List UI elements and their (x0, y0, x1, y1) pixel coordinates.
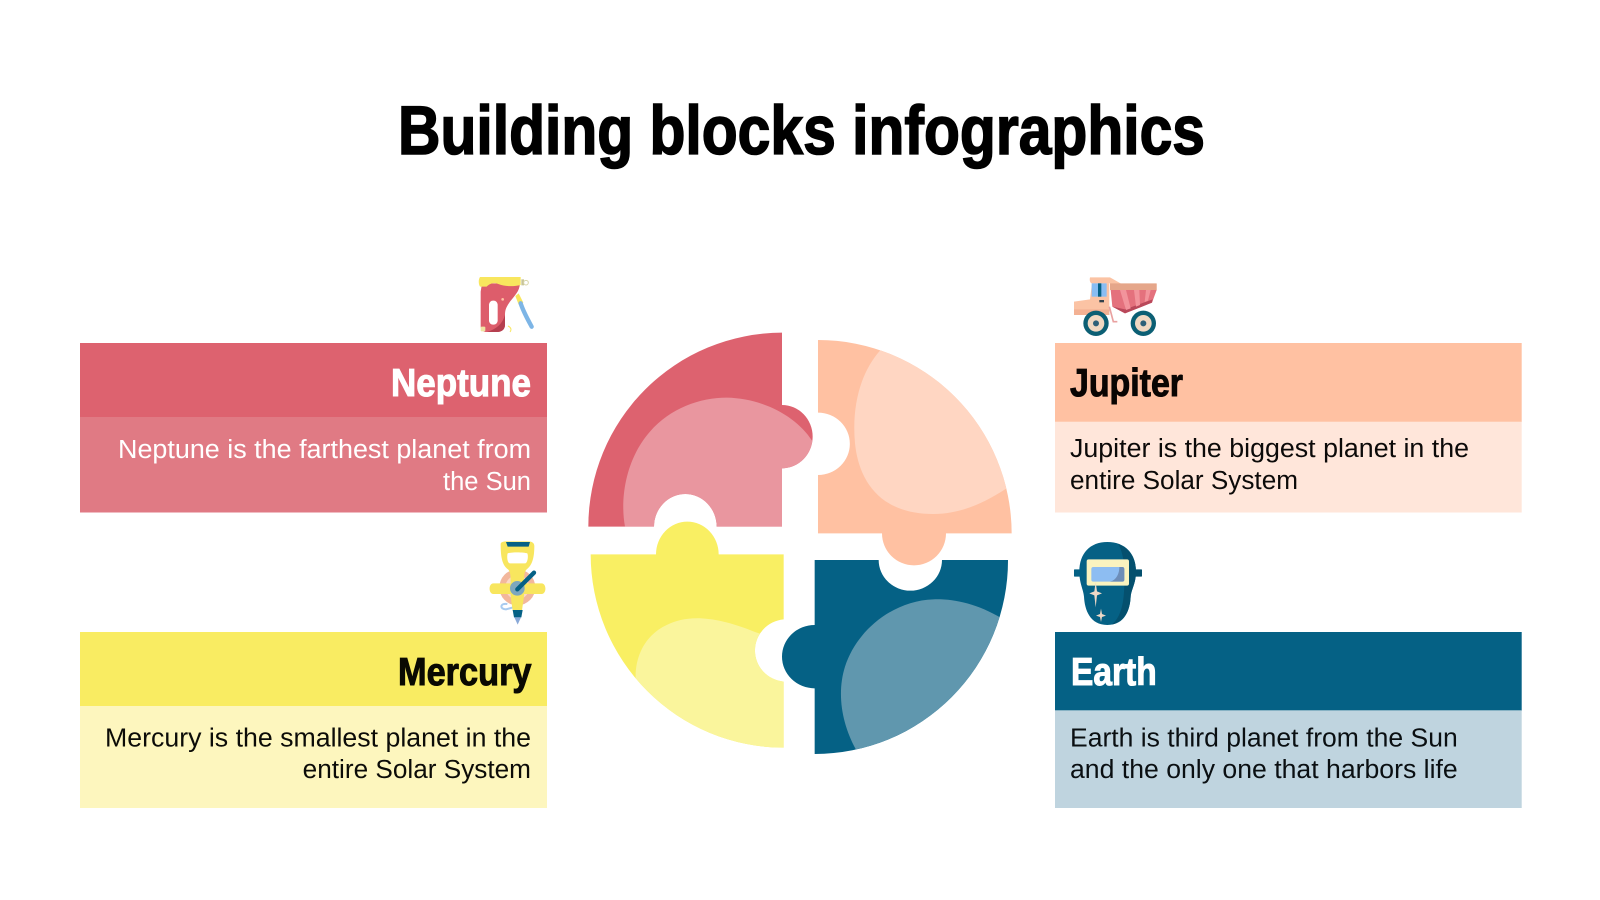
Jupiter heading: Jupiter (1070, 362, 1183, 405)
puzzle piece: peach (818, 340, 1012, 566)
puzzle piece: red (588, 332, 813, 527)
Neptune header (80, 343, 547, 418)
Earth body (1055, 710, 1522, 808)
Mercury body (80, 706, 547, 808)
panel: Jupiter (1055, 343, 1522, 512)
Jupiter description (1070, 435, 1469, 495)
icon: welding helmet (1074, 542, 1142, 625)
icon: stapler (479, 277, 532, 332)
puzzle circle (588, 332, 1012, 754)
Mercury heading: Mercury (398, 651, 532, 694)
Neptune description (118, 436, 531, 496)
Mercury description: Mercury is the smallest planet in the (105, 725, 531, 753)
Neptune description: the Sun (443, 468, 531, 496)
Mercury description: entire Solar System (303, 756, 531, 784)
Earth heading: Earth (1071, 651, 1157, 694)
Earth header (1055, 632, 1522, 711)
panel: Mercury (80, 632, 547, 808)
Mercury header (80, 632, 547, 706)
Mercury description (105, 725, 531, 784)
puzzle piece: yellow (590, 522, 784, 748)
icon: tape measure tool (490, 541, 545, 625)
Jupiter description: Jupiter is the biggest planet in the (1070, 435, 1469, 463)
Jupiter header (1055, 343, 1522, 422)
puzzle piece: blue (782, 560, 1008, 754)
panel: Earth (1055, 632, 1522, 808)
Earth description: Earth is third planet from the Sun (1070, 725, 1458, 753)
Jupiter description: entire Solar System (1070, 467, 1298, 495)
Jupiter body (1055, 422, 1522, 512)
Earth description (1070, 725, 1458, 784)
Neptune heading: Neptune (391, 362, 531, 405)
Earth description: and the only one that harbors life (1070, 756, 1458, 784)
panel: Neptune (80, 343, 547, 512)
title: Building blocks infographics (398, 92, 1205, 169)
icon: dump truck (1074, 277, 1157, 336)
Neptune description: Neptune is the farthest planet from (118, 436, 531, 464)
Neptune body (80, 417, 547, 512)
